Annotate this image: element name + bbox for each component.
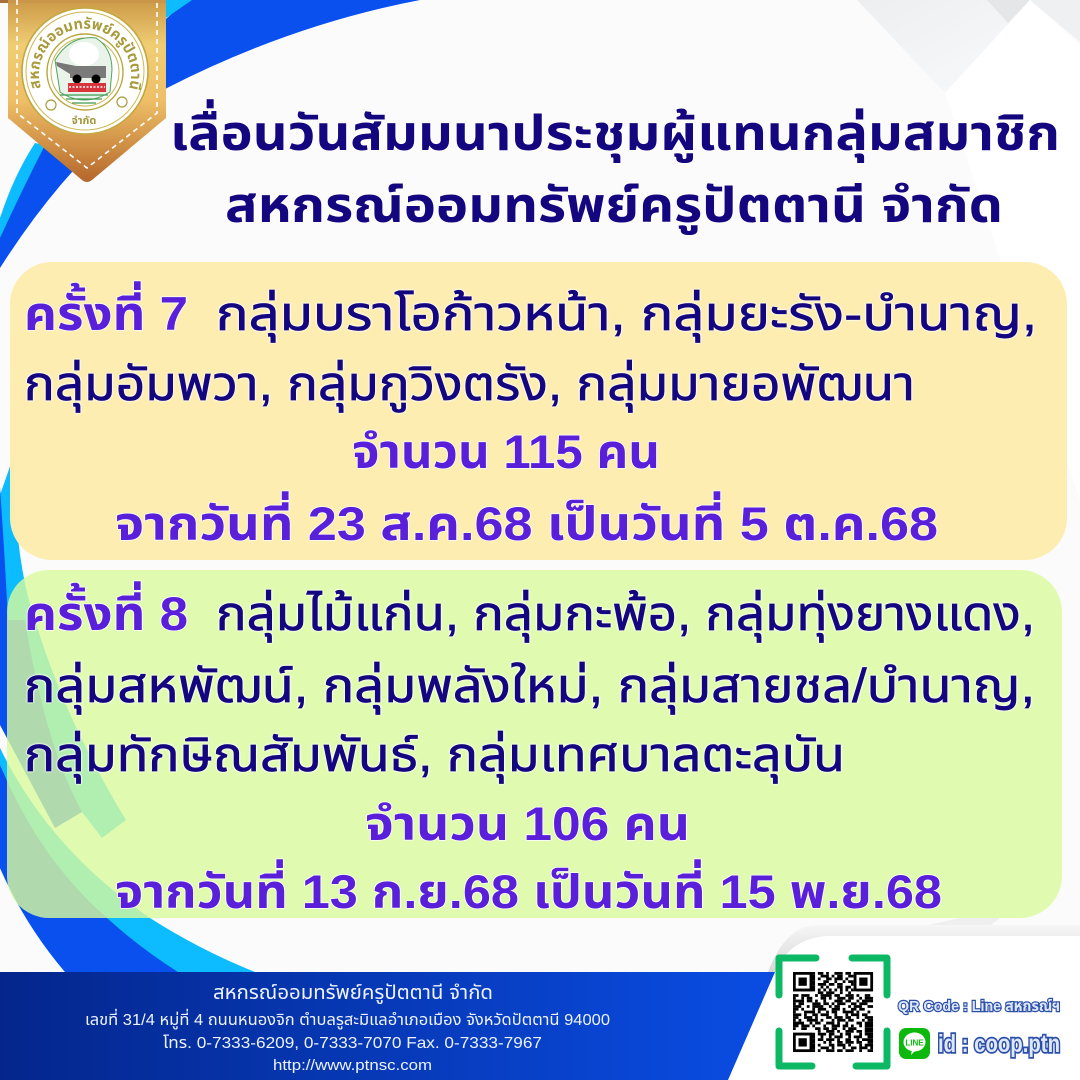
text block: round 7: กลุ่มบราโอก้าวหน้า, กลุ่มยะรัง-บำนาญ, (216, 287, 1037, 342)
text block: round 8: กลุ่มสหพัฒน์, กลุ่มพลังใหม่, กลุ่มสายชล/บำนาญ, (24, 659, 1035, 714)
panel: round 7 background (10, 262, 1067, 560)
footer contact text: สหกรณ์ออมทรัพย์ครูปัตตานี จำกัด (213, 982, 493, 1005)
white QR tab (728, 925, 1080, 1080)
footer contact text: โทร. 0-7333-6209, 0-7333-7070 Fax. 0-7333-7967 (163, 1035, 542, 1052)
title: เลื่อนวันสัมมนาประชุมผู้แทนกลุ่มสมาชิก (170, 99, 1060, 163)
text block: round 8 (24, 581, 1035, 918)
text block: round 8: ครั้งที่ 8 (24, 581, 188, 640)
title: สหกรณ์ออมทรัพย์ครูปัตตานี จำกัด (225, 179, 1003, 235)
icon: QR frame brackets (779, 958, 887, 1066)
text block: round 8: จำนวน 106 คน (365, 797, 690, 850)
panel: round 8 background (7, 570, 1062, 918)
swoosh: left blades (0, 455, 126, 838)
footer band (0, 972, 800, 1080)
icon: seal (21, 8, 149, 135)
icon: LINE logo: LINE (905, 1038, 924, 1048)
icon: seal: จำกัด (72, 115, 96, 127)
swoosh: top blue arc (0, 0, 420, 268)
text block: round 8: กลุ่มไม้แก่น, กลุ่มกะพ้อ, กลุ่มทุ่งยางแดง, (216, 587, 1035, 642)
text block: round 7: จำนวน 115 คน (352, 425, 660, 478)
swoosh: lower crescent (0, 748, 255, 972)
text block: round 8: กลุ่มทักษิณสัมพันธ์, กลุ่มเทศบาลตะลุบัน (24, 728, 845, 783)
text block: round 7: ครั้งที่ 7 (24, 281, 188, 340)
text block: round 7: กลุ่มอัมพวา, กลุ่มกูวิงตรัง, กลุ่มมายอพัฒนา (24, 357, 915, 412)
text block: round 8: จากวันที่ 13 ก.ย.68 เป็นวันที่ 15 พ.ย.68 (115, 859, 942, 918)
footer contact text: เลขที่ 31/4 หมู่ที่ 4 ถนนหนองจิก ตำบลรูสะมิแลอำเภอเมือง จังหวัดปัตตานี 94000 (85, 1008, 610, 1029)
text block: round 7: จากวันที่ 23 ส.ค.68 เป็นวันที่ 5 ต.ค.68 (115, 491, 938, 550)
QR caption: QR Code : Line สหกรณ์ฯ (898, 998, 1060, 1015)
footer contact text (85, 982, 610, 1074)
icon: LINE logo (899, 1028, 930, 1059)
icon: seal: สหกรณ์ออมทรัพย์ครูปัตตานี (30, 16, 142, 90)
text block: round 7 (24, 281, 1037, 550)
title (170, 99, 1060, 235)
footer contact text: http://www.ptnsc.com (273, 1057, 432, 1074)
badge: gold ribbon with cooperative seal (0, 0, 166, 182)
icon: QR code (793, 973, 873, 1051)
